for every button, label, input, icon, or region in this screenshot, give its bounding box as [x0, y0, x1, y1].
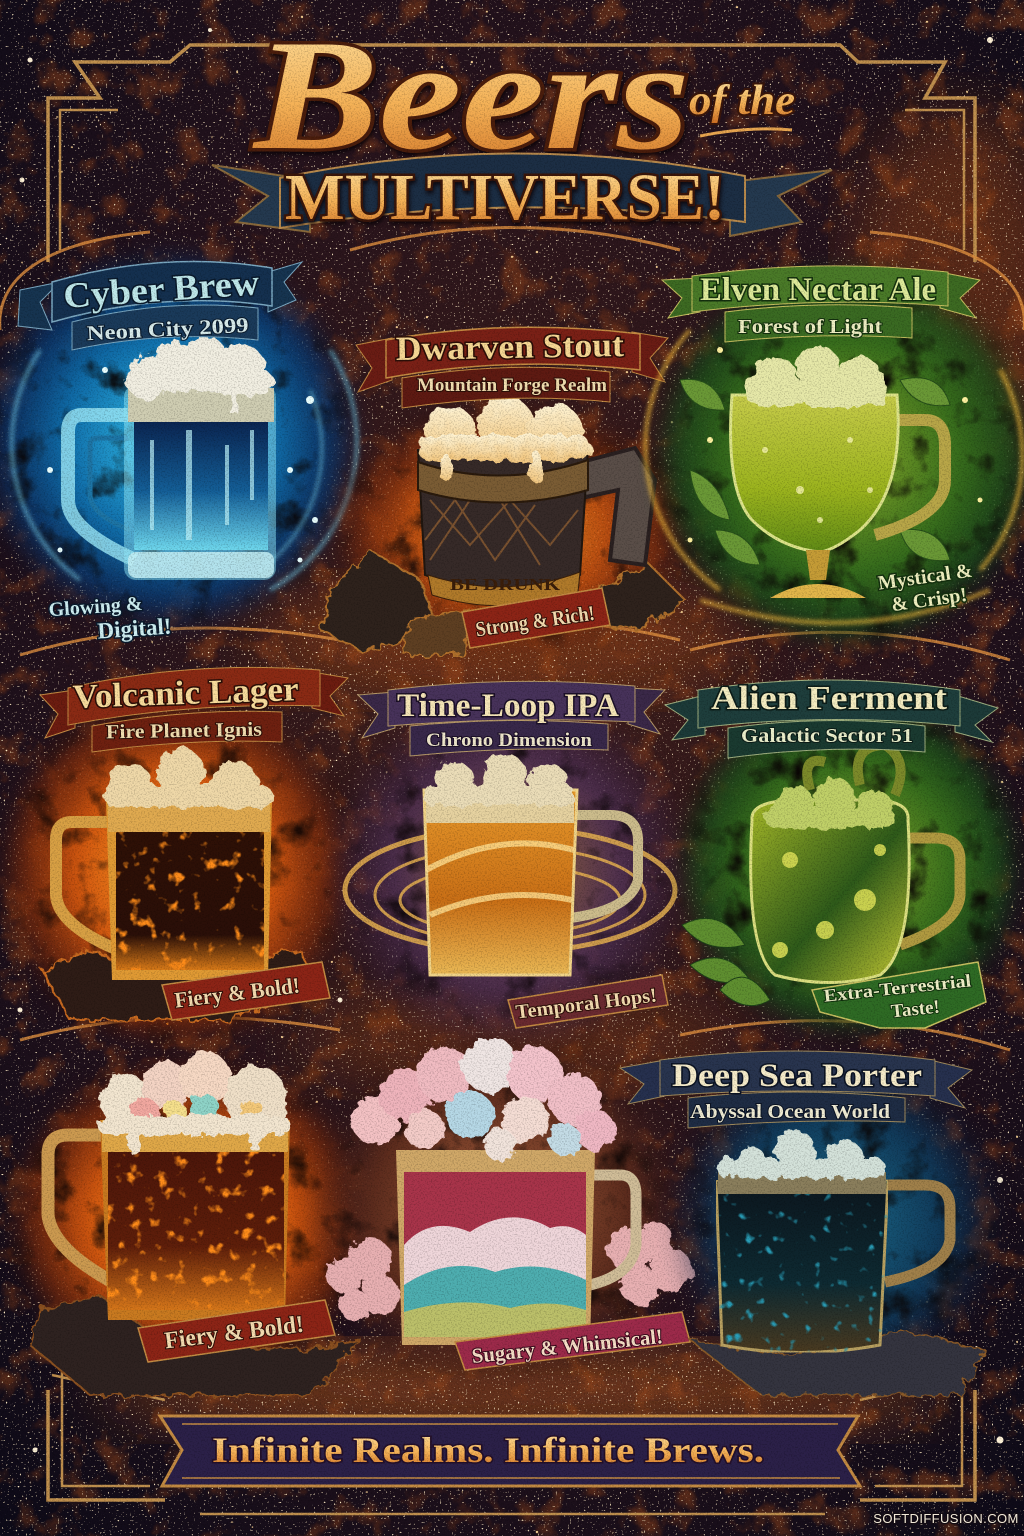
text: subtitle: Mountain Forge Realm [417, 375, 607, 396]
text: subtitle: Fire Planet Ignis [106, 719, 262, 743]
panel: Dwarven Stout [320, 327, 690, 655]
text: title: Deep Sea Porter [672, 1058, 922, 1094]
foam [424, 754, 574, 805]
mug: sugary [351, 1037, 636, 1345]
footer banner [160, 1416, 860, 1486]
panel: Fiery mug [5, 1052, 375, 1395]
tag: Sugary & Whimsical [455, 1312, 690, 1370]
foam [126, 336, 274, 415]
mug: fiery [48, 1052, 290, 1320]
glow [0, 245, 365, 635]
ribbon: Elven Nectar Ale [662, 266, 980, 342]
side clouds [327, 1222, 692, 1321]
text: title: Dwarven Stout [396, 327, 625, 368]
title [212, 8, 832, 236]
glow [0, 690, 355, 1050]
foam [351, 1037, 615, 1161]
tag: Glowing & Digital: Glowing & [48, 593, 143, 621]
text: title: Alien Ferment [711, 680, 948, 717]
text: title: Elven Nectar Ale [700, 272, 936, 308]
ribbon: Deep Sea Porter [620, 1051, 972, 1128]
tag: Glowing & Digital [48, 593, 172, 644]
mug: alien [751, 778, 960, 982]
glow [310, 1030, 690, 1390]
foam [98, 1052, 290, 1155]
heading: of the: of the [689, 78, 795, 124]
tentacles [807, 745, 901, 795]
foam [745, 346, 887, 406]
rocks [30, 1295, 360, 1395]
tag: Mystical & Crisp [877, 560, 974, 616]
title ribbon [212, 153, 832, 236]
tag: Temporal Hops: Temporal Hops! [514, 984, 658, 1024]
text: subtitle: Neon City 2099 [86, 313, 249, 345]
rocks [320, 550, 685, 655]
panel: Sugary mug [310, 1030, 692, 1390]
tag: Strong & Rich: Strong & Rich! [474, 601, 596, 641]
mug: deep sea [716, 1130, 950, 1352]
leaves [682, 918, 770, 1006]
tag: Fiery & Bold 2 [138, 1300, 335, 1362]
text: subtitle: Forest of Light [738, 316, 882, 338]
heading: multiverse: MULTIVERSE! [285, 161, 725, 234]
ribbon: Dwarven Stout [356, 327, 668, 408]
text: subtitle: Galactic Sector 51 [741, 725, 913, 747]
mug: volcanic [56, 748, 272, 980]
glow [330, 405, 690, 655]
foam [718, 1130, 884, 1178]
text: tagline: Infinite Realms. Infinite Brews. [212, 1430, 764, 1470]
tag: Fiery & Bold 2: Fiery & Bold! [163, 1312, 305, 1354]
mug: elven [731, 346, 945, 598]
glow [675, 690, 1024, 1040]
panel: Deep Sea Porter [620, 1050, 1005, 1395]
glow [325, 685, 695, 1055]
panel: Time-Loop IPA [325, 681, 695, 1055]
rocks [42, 950, 320, 1020]
ribbon: Cyber Brew [18, 262, 302, 350]
glow [645, 260, 1024, 650]
tag: Fiery & Bold [162, 962, 330, 1020]
tag: Temporal Hops [508, 975, 668, 1028]
panel: Elven Nectar Ale [645, 260, 1024, 650]
ribbon: Time-Loop IPA [358, 681, 665, 756]
panel: Alien Ferment [665, 680, 1024, 1040]
watermark: SOFTDIFFUSION.COM [873, 1511, 1019, 1526]
text: title: Time-Loop IPA [397, 688, 619, 724]
ribbon: Alien Ferment [665, 680, 998, 758]
text: title: Volcanic Lager [72, 671, 299, 716]
glow [665, 1050, 1005, 1390]
tag: Mystical & Crisp: Mystical & [877, 560, 974, 595]
foam [418, 396, 590, 482]
text: title: Cyber Brew [62, 262, 260, 316]
mug: time-loop [424, 754, 638, 975]
tag: Mystical & Crisp: & Crisp! [890, 584, 968, 616]
tag: Extra-Terrestrial Taste: Taste! [890, 997, 941, 1023]
foam [765, 778, 895, 828]
text: subtitle: Abyssal Ocean World [690, 1101, 890, 1123]
ribbon: Volcanic Lager [40, 667, 348, 752]
panel: Volcanic Lager [0, 667, 355, 1050]
tag: Sugary & Whimsical: Sugary & Whimsical! [471, 1324, 664, 1368]
tag: Fiery & Bold: Fiery & Bold! [173, 972, 301, 1013]
panel: Cyber Brew [0, 245, 365, 644]
tag: Extra-Terrestrial Taste [812, 962, 986, 1028]
text: mug inscription: BE DRUNK [450, 575, 561, 594]
rocks [690, 1330, 985, 1395]
tag: Extra-Terrestrial Taste: Extra-Terrestrial [823, 970, 972, 1006]
heading: Beers: Beers [252, 8, 690, 183]
glow [5, 1055, 375, 1385]
text: subtitle: Chrono Dimension [426, 730, 592, 751]
tag: Strong & Rich [462, 588, 610, 648]
tag: Glowing & Digital: Digital! [97, 613, 172, 644]
mug: cyber [68, 336, 276, 580]
foam [104, 748, 272, 809]
mug: dwarven [418, 396, 655, 606]
time rings back [345, 828, 675, 952]
underline [700, 129, 792, 136]
leaves [680, 378, 950, 565]
